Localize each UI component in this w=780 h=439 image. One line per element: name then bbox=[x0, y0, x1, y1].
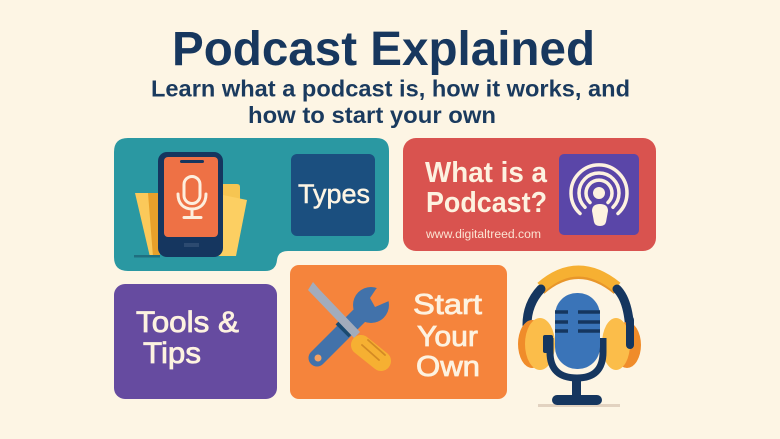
panel: start your own bbox=[290, 265, 507, 399]
website url: www.digitaltreed.com bbox=[425, 229, 541, 241]
icon: microphone with headphones bbox=[518, 271, 641, 407]
panel: tools and tips bbox=[114, 284, 277, 399]
heading: start your own bbox=[413, 289, 482, 383]
icon: microphone bbox=[178, 176, 206, 218]
title: Podcast Explained bbox=[172, 23, 595, 76]
heading: what is a podcast bbox=[425, 157, 548, 219]
subtitle: Learn what a podcast is, how it works, and bbox=[151, 76, 630, 102]
heading: start your own: Your bbox=[417, 321, 478, 353]
label box: types bbox=[291, 154, 375, 236]
panel: tools and tips: Tips bbox=[143, 337, 201, 370]
panel: types bbox=[114, 138, 389, 271]
subtitle: how to start your own bbox=[248, 102, 496, 128]
heading: start your own: Own bbox=[416, 351, 480, 383]
panel: tools and tips: Tools & bbox=[136, 306, 239, 339]
icon: folder with phone bbox=[134, 152, 247, 258]
icon: wrench and screwdriver bbox=[308, 280, 398, 362]
heading: what is a podcast: What is a bbox=[425, 157, 548, 189]
heading: what is a podcast: Podcast? bbox=[426, 187, 547, 219]
subtitle bbox=[151, 76, 630, 128]
panel: what is a podcast bbox=[403, 138, 656, 251]
label box: types: Types bbox=[298, 179, 370, 209]
heading: start your own: Start bbox=[413, 289, 482, 321]
icon: podcast signal bbox=[559, 154, 639, 235]
